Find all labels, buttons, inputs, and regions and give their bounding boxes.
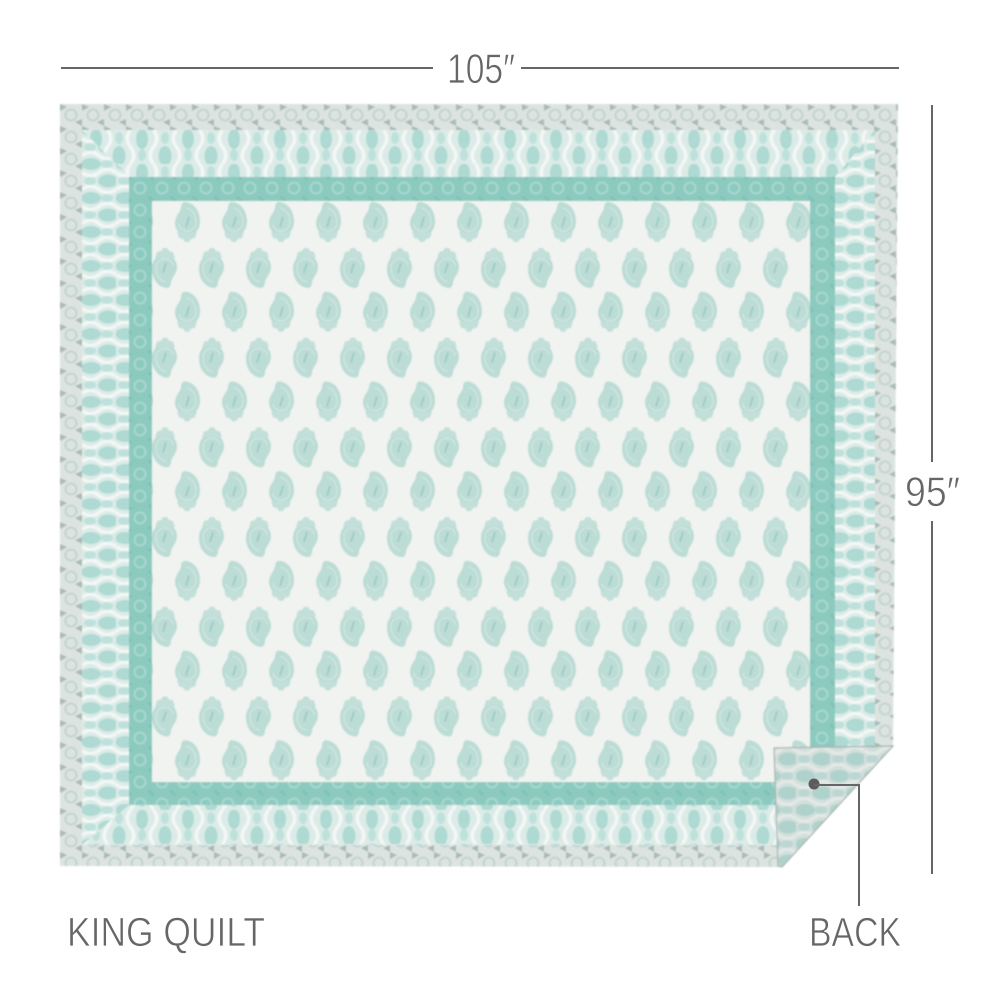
white centre panel with paisley motifs (152, 201, 810, 782)
height label: 95″ (905, 468, 960, 515)
teal inner border (129, 177, 835, 805)
callout marker dot (808, 778, 820, 790)
outer printed border (60, 104, 898, 867)
wave border top (82, 130, 875, 177)
wave border bottom (82, 805, 875, 845)
quilt (60, 104, 898, 867)
caption: king quilt: KING QUILT (67, 909, 265, 955)
width label: 105″ (447, 45, 515, 92)
wave border left (82, 130, 129, 845)
caption: back: BACK (809, 909, 901, 955)
back callout (808, 778, 859, 906)
wave border right (835, 130, 875, 845)
folded corner showing back (774, 746, 893, 867)
